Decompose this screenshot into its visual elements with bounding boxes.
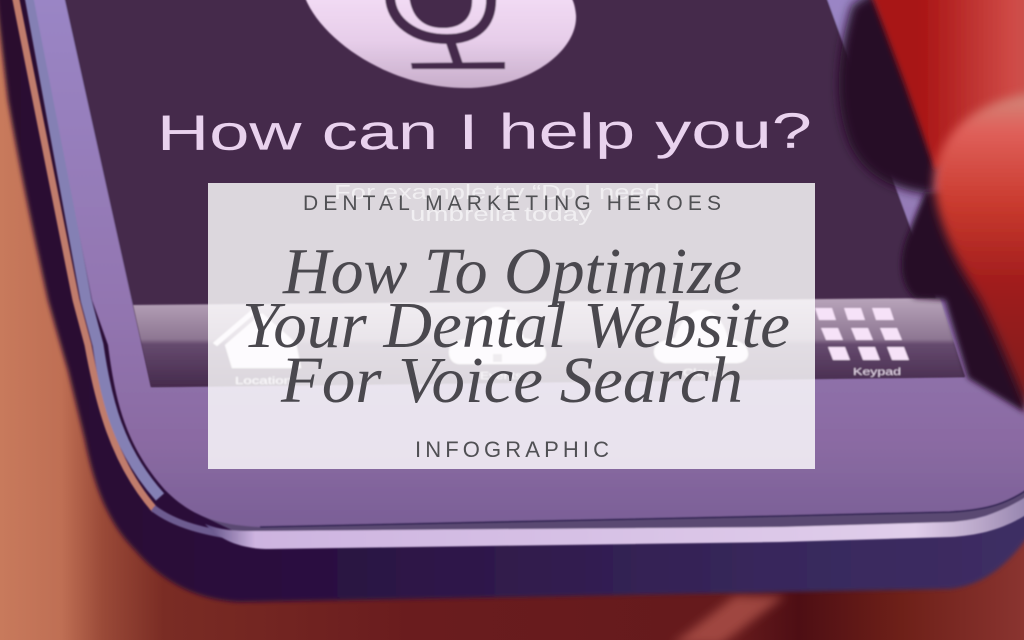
- icon: keypad grid: [815, 308, 909, 360]
- mic stem: [445, 40, 463, 64]
- app dock strip: [133, 298, 965, 387]
- dock labels: [235, 367, 901, 387]
- icon: cloud events: [449, 307, 546, 364]
- voice prompt example: [334, 182, 660, 226]
- voice prompt example: For example try “Do I need: [334, 182, 660, 204]
- voice prompt heading: How can I help you?: [157, 103, 812, 161]
- dock labels: Cloud: [683, 368, 720, 379]
- reflected skin edge: [12, 0, 155, 510]
- fingertip: [934, 92, 1024, 412]
- foreground fingers: [839, 0, 1024, 412]
- brand label: DENTAL MARKETING HEROES: [303, 192, 721, 215]
- mic cradle: [390, 0, 491, 39]
- upper finger shadow: [839, 0, 950, 195]
- mic base: [411, 62, 505, 69]
- main title: For Voice Search: [280, 344, 743, 417]
- mic disc: [304, 0, 576, 88]
- main title: How To Optimize: [282, 235, 742, 308]
- infographic label: INFOGRAPHIC: [415, 437, 609, 462]
- corner lead-in to chrome: [153, 508, 245, 538]
- dock labels: Location: [235, 376, 292, 387]
- voice prompt example: umbrella today: [410, 204, 592, 226]
- glass lower edge line: [260, 480, 1024, 527]
- title panel: [208, 183, 815, 469]
- main title: [242, 235, 790, 417]
- phone screen: [60, 0, 965, 387]
- blue bevel: [27, 0, 160, 497]
- chrome edge highlight: [205, 488, 1024, 549]
- icon: cloud: [654, 310, 748, 363]
- bezel band under glass: [200, 470, 1024, 534]
- dock labels: Keypad: [853, 367, 901, 378]
- dock labels: Events: [480, 371, 522, 382]
- mic capsule: [409, 0, 472, 28]
- icon: house: [213, 307, 301, 368]
- microphone icon: [304, 0, 576, 88]
- phone front glass: [30, 0, 1024, 527]
- dock background: [133, 298, 965, 387]
- lower finger shadow: [902, 190, 1024, 412]
- red finger: [862, 0, 1024, 170]
- main title: Your Dental Website: [242, 289, 790, 362]
